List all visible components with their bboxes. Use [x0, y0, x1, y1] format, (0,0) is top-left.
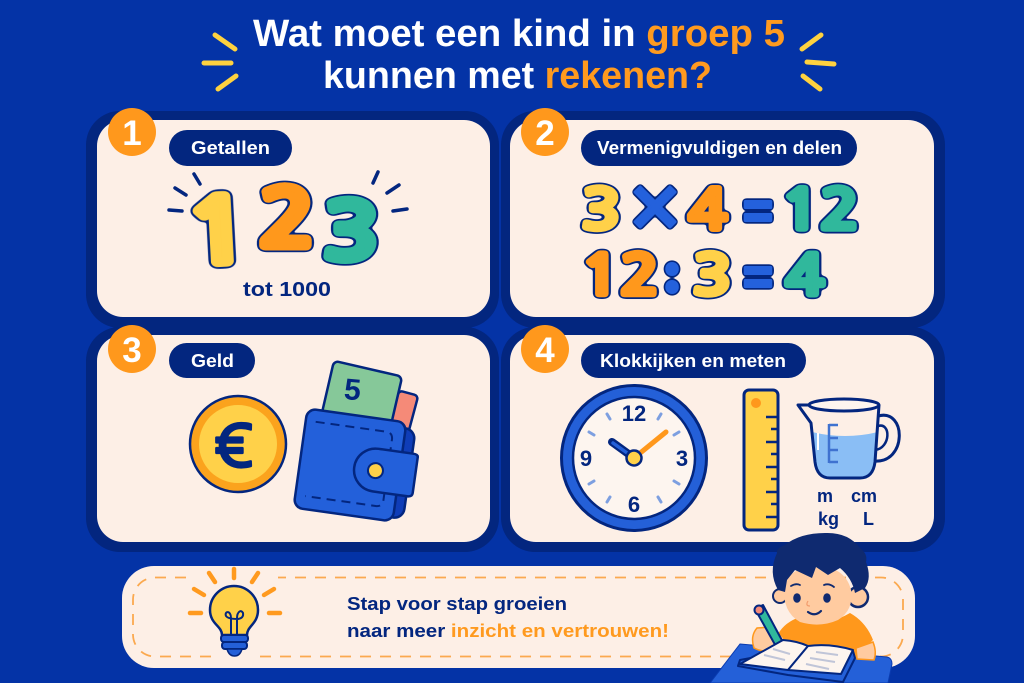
shirt — [778, 613, 873, 660]
equation: 3 x 4 = 12: 12 — [781, 184, 859, 237]
equation: 12 : 3 = 4: : — [663, 235, 681, 307]
units labels: L — [863, 509, 874, 529]
panel: geld: Geld — [191, 351, 234, 371]
icon: euro coin: € — [216, 418, 254, 476]
equation: 12 : 3 = 4 — [581, 235, 825, 309]
panel: vermenigvuldigen en delen: Vermenigvuldigen en delen — [597, 138, 842, 158]
label: tot 1000: tot 1000 — [243, 279, 331, 301]
icon: clock: 6 — [628, 492, 640, 517]
face — [784, 566, 851, 625]
panel: geld: 3 — [122, 331, 142, 370]
equation: 3 x 4 = 12: × — [625, 161, 685, 248]
illustration: boy writing in a book — [710, 533, 892, 683]
icon: wallet with banknote: 5 — [343, 373, 362, 407]
panel: geld — [86, 325, 499, 552]
icon: right title sparkle — [802, 35, 834, 89]
big numbers 1 2 3: 3 — [323, 194, 379, 271]
equation: 3 x 4 = 12: 4 — [688, 184, 728, 237]
panel: klokkijken en meten: Klokkijken en meten — [600, 351, 786, 371]
callout text: Stap voor stap groeien — [347, 593, 567, 614]
panel: getallen: Getallen — [191, 138, 270, 158]
panel: getallen: 1 — [122, 114, 142, 153]
panel: getallen — [86, 108, 499, 328]
units labels — [817, 486, 877, 529]
title: Wat moet een kind in groep 5 — [253, 13, 785, 55]
equation: 12 : 3 = 4: 4 — [785, 249, 825, 303]
equation: 12 : 3 = 4: 3 — [692, 249, 732, 303]
right arm — [856, 642, 875, 660]
icon: measuring jug — [798, 399, 899, 478]
equation: 3 x 4 = 12 — [581, 161, 859, 248]
units labels: cm — [851, 486, 877, 506]
icon: lightbulb — [190, 569, 280, 656]
title — [253, 13, 785, 97]
panel: klokkijken en meten: 4 — [535, 331, 555, 370]
big numbers 1 2 3: 2 — [259, 181, 315, 258]
desk — [710, 644, 892, 683]
equation: 3 x 4 = 12: 3 — [581, 184, 621, 237]
ears — [773, 589, 787, 603]
panel: klokkijken en meten — [501, 325, 945, 552]
title: kunnen met rekenen? — [323, 55, 712, 97]
callout text — [347, 593, 669, 641]
icon: euro coin — [190, 396, 286, 492]
panel: bottom callout — [122, 566, 915, 668]
hair — [773, 533, 869, 593]
eyes and smile — [791, 584, 834, 614]
icon: clock — [562, 386, 706, 530]
equation: 12 : 3 = 4: 12 — [581, 249, 659, 303]
icon: wallet with banknote — [294, 361, 422, 524]
icon: clock: 12 — [622, 401, 646, 426]
equation: 12 : 3 = 4: = — [743, 239, 773, 309]
units labels: m — [817, 486, 833, 506]
patch: dash gaps around lightbulb — [186, 572, 278, 662]
units labels: kg — [818, 509, 839, 529]
icon: ruler — [744, 390, 778, 530]
panel: vermenigvuldigen en delen — [501, 108, 945, 328]
icon: clock: 9 — [580, 446, 592, 471]
icon: clock: 3 — [676, 446, 688, 471]
icon: number sparks — [169, 172, 407, 211]
big numbers 1 2 3: 1 — [183, 187, 254, 277]
open book — [738, 640, 855, 682]
pencil — [754, 605, 785, 655]
panel: vermenigvuldigen en delen: 2 — [535, 114, 555, 153]
equation: 3 x 4 = 12: = — [743, 173, 773, 243]
left hand — [753, 627, 784, 651]
icon: left title sparkle — [204, 35, 236, 89]
callout text: naar meer inzicht en vertrouwen! — [347, 620, 669, 641]
big numbers 1 2 3 — [183, 181, 379, 277]
